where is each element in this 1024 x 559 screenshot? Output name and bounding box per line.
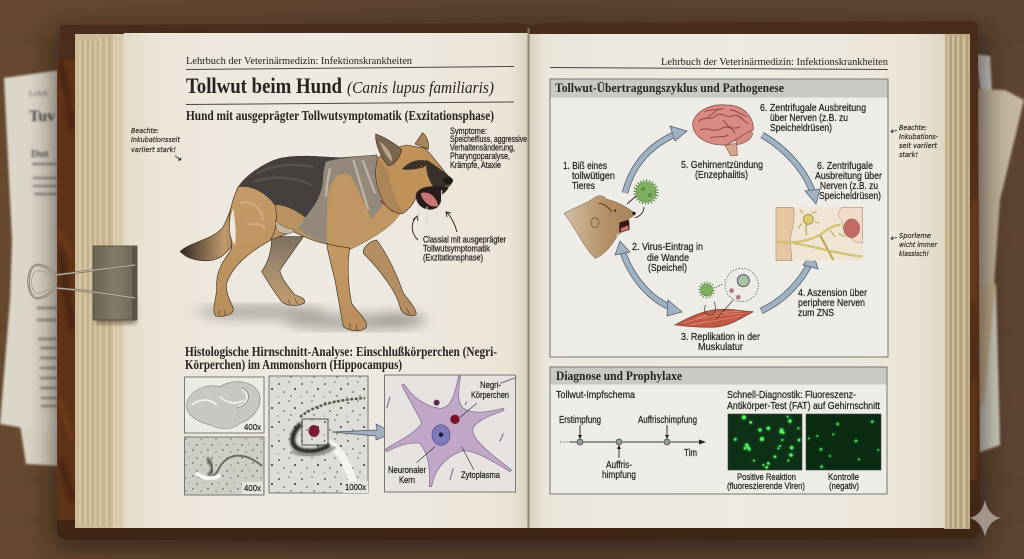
panel: neuron with Negri bodies: Zytoplasma [461,470,500,480]
paws detail [219,298,410,330]
panel header strip [550,80,888,98]
vaccination schedule: Tollwut-Impfschema [556,389,635,401]
vaccination schedule: himpfung [602,470,636,481]
cycle label 6 top: über Nerven (z.B. zu [770,112,848,124]
annotation: symptoms list [450,126,527,171]
cycle label 3 [681,331,760,353]
handwritten note: symptoms, right [891,232,938,258]
panel header strip [550,368,886,384]
annotation: symptoms list: Verhaltensänderung, [450,142,515,154]
panel: neuron with Negri bodies: Kern [399,475,415,485]
panel: neuron with Negri bodies: Neuronaler [388,465,426,475]
annotation: symptoms list: Symptome: [450,126,487,137]
handwritten note: incubation, left: Inkubationsseit [131,136,180,144]
running head left: Lehrbuch der Veterinärmedizin: Infektionskrankheiten [186,55,412,67]
handwritten note: incubation, right: stark! [899,151,918,159]
histology heading [185,345,497,373]
mouth [416,186,448,209]
mane and shoulder grey [298,155,383,243]
cycle label 6 right: Ausbreitung über [815,170,882,182]
collar [381,201,393,212]
cycle label 1: Tieres [572,180,595,192]
main title: Tollwut beim Hund [186,73,342,98]
cycle label 5: 5. Gehirnentzündung [681,159,763,171]
cycle label 6 top: 6. Zentrifugale Ausbreitung [760,102,866,114]
cycle arrow: double-headed, bite and muscle [615,241,682,316]
annotation: classic symptomatic callout with arrows: Tollwutsymptomatik [423,244,490,254]
panel: diagnosis and prophylaxis [550,367,887,494]
cycle arrow: muscle to nerves [761,252,818,311]
loose paper behind the book, right [975,54,1024,453]
cycle label 3: Muskulatur [698,341,743,353]
left page [124,33,529,528]
main title: (Canis lupus familiaris) [347,78,494,97]
cycle label 2: die Wande [647,252,689,264]
cycle label 2 [632,241,703,274]
handwritten note: symptoms, right: wicht immer [899,241,938,249]
cycle label 2: 2. Virus-Eintrag in [632,241,703,253]
cycle label 4 [798,287,867,319]
panel: hippocampus 400x [184,437,264,495]
ears [415,133,429,149]
illustration: German shepherd with rabies symptoms [180,133,453,331]
fluorescence image: control [806,414,881,470]
histology heading: Körperchen) im Ammonshorn (Hippocampus) [185,358,402,373]
panel: hippocampus 1000x with zoom box [269,376,368,493]
hind thigh and lower leg [214,186,276,316]
annotation: classic symptomatic callout with arrows [412,212,506,264]
vaccination schedule: Tim [684,448,697,459]
loose paper behind the book, left [0,70,60,466]
cycle label 6 top [760,102,866,134]
loose paper behind the book, left: Lehrb [29,89,48,98]
handwritten note: incubation, right: seit variiert [899,142,937,150]
handwritten note: incubation, right [891,124,938,159]
running head right: Lehrbuch der Veterinärmedizin: Infektionskrankheiten [661,56,888,68]
panel: brain section 400x: 400x [244,422,262,432]
handwritten note: incubation, left: Beachte: [131,127,159,135]
panel heading: Tollwut-Übertragungszyklus und Pathogenese [555,80,784,95]
black saddle [237,156,353,217]
sheath [275,220,295,234]
cycle label 2: (Speichel) [648,262,687,274]
cycle label 4: zum ZNS [798,307,834,319]
panel: neuron with Negri bodies: Körperchen [471,390,509,400]
right page [529,34,945,528]
arrow: magnification to neuron [332,424,393,440]
cycle label 5: (Enzephalitis) [695,169,748,181]
far hind leg [262,237,305,305]
binder clip [28,246,137,324]
annotation: classic symptomatic callout with arrows: Classial mit ausgeprägter [423,234,506,246]
head [376,145,452,214]
annotation: symptoms list: Speichelfluss, aggressive [450,134,527,145]
icon: nerves to salivary glands [776,207,863,261]
vaccination schedule: Auffrischimpfung [638,415,697,426]
cycle label 4: 4. Aszension über [798,287,867,299]
tail [180,188,243,261]
cycle label 3: 3. Replikation in der [681,331,760,343]
near front leg [327,243,367,331]
handwritten note: incubation, right: Inkubations- [899,133,938,141]
cycle arrow: brain to glands [762,135,820,204]
FAT captions: (negativ) [829,481,859,492]
icon: rabid animal head [564,196,636,258]
cycle label 5 [681,159,763,181]
cycle label 6 top: Speicheldrüsen) [770,122,832,134]
panel heading: Diagnose und Prophylaxe [556,369,682,383]
panel: neuron with Negri bodies [384,375,517,492]
handwritten note: symptoms, right: klassisch! [899,250,929,258]
far front leg [363,240,416,316]
spine fold [528,28,530,528]
panel: neuron with Negri bodies: Negri- [480,380,501,390]
icon: muscle with replicating virus [675,268,758,327]
cycle label 6 right: Speicheldrüsen) [819,190,881,202]
FAT heading: Schnell-Diagnostik: Fluoreszenz- [727,389,856,401]
panel: hippocampus 400x: 400x [244,483,262,493]
vaccination schedule: Auffris- [606,460,632,471]
handwritten note: incubation, left: variiert stark! [131,146,176,154]
icon: brain [693,105,753,156]
loose paper behind the book, left: Tuv [29,108,55,125]
handwritten note: incubation, left [131,127,181,160]
cycle label 4: periphere Nerven [798,297,865,309]
sparkle watermark [969,500,1001,537]
dark eye band and snout [402,160,430,170]
FAT heading [727,389,880,412]
panel: transmission cycle [550,79,888,357]
FAT captions: Kontrolle [828,472,859,483]
subtitle: Hund mit ausgeprägter Tollwutsymptomatik (Exzitationsphase) [186,109,494,124]
right page edge stack [944,34,970,529]
left page edge stack [75,34,125,528]
cycle label 1: tollwütigen [572,170,615,182]
loose paper behind the book, left: Dut [31,148,49,160]
chest and shoulder [327,174,401,249]
annotation: classic symptomatic callout with arrows: (Exzitationsphase) [423,252,483,264]
annotation: symptoms list: Pharyngoparalyse, [450,151,510,162]
handwritten note: incubation, right: Beachte: [899,124,927,132]
FAT captions: (fluoreszierende Viren) [727,481,805,492]
vaccination schedule [556,389,706,481]
cycle label 6 right [815,160,882,202]
fluorescence image: positive [728,414,802,470]
histology heading: Histologische Hirnschnitt-Analyse: Einschlußkörperchen (Negri- [185,345,497,360]
cycle arrow: bite to brain [625,126,687,193]
annotation: symptoms list: Krämpfe, Ataxie [450,160,501,171]
panel: brain section 400x [184,377,264,433]
FAT captions [727,472,859,492]
vaccination schedule: Erstimpfung [559,415,601,426]
cycle label 6 right: 6. Zentrifugale [817,160,873,172]
icon: virus near muzzle [627,180,658,218]
FAT heading: Antikörper-Test (FAT) auf Gehirnschnitt [727,400,880,412]
torso [237,155,400,249]
shadow under dog [196,305,425,330]
cycle label 1: 1. Biß eines [563,160,607,172]
handwritten note: symptoms, right: Sporleme [899,232,931,240]
panel: hippocampus 1000x with zoom box: 1000x [345,482,367,492]
cycle label 1 [563,160,615,192]
cycle label 6 right: Nerven (z.B. zu [820,180,878,192]
FAT captions: Positive Reaktion [737,472,796,483]
saliva [419,190,442,225]
